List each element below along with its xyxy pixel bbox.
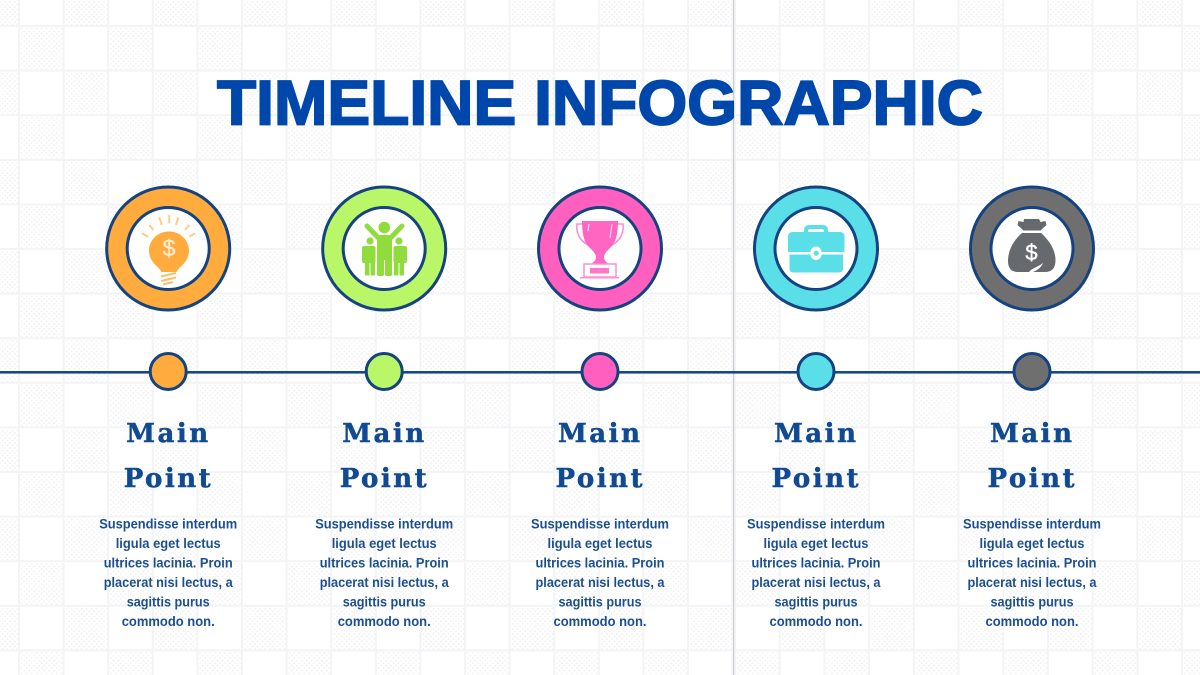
body text: ligula eget lectus [332, 536, 437, 551]
column 3: trophy [531, 187, 669, 629]
body text: ultrices lacinia. Proin [320, 556, 449, 570]
body text: sagittis purus [127, 594, 210, 610]
body text: ligula eget lectus [548, 536, 652, 551]
body text: Suspendisse interdum [315, 516, 453, 532]
body text: Suspendisse interdum [963, 516, 1101, 532]
ring: green [333, 197, 436, 300]
column 5: money bag [963, 187, 1101, 629]
title: TIMELINE INFOGRAPHIC [217, 68, 983, 138]
ring: orange [117, 197, 220, 300]
ring outlines [107, 187, 230, 310]
node: cyan [798, 354, 834, 390]
body text: placerat nisi lectus, a [752, 575, 881, 590]
ring outlines [970, 187, 1094, 310]
heading [556, 419, 642, 494]
body text: ultrices lacinia. Proin [104, 556, 233, 570]
body text: commodo non. [554, 614, 646, 629]
heading [772, 419, 858, 494]
timeline line [0, 371, 1200, 374]
body text: placerat nisi lectus, a [536, 575, 665, 590]
body text: sagittis purus [774, 594, 858, 610]
icon: briefcase [788, 225, 844, 272]
heading: Point [124, 464, 211, 494]
icon: money bag: $ [1025, 240, 1038, 265]
ring outlines [538, 187, 662, 310]
heading [124, 419, 211, 494]
icon: people cheering [362, 222, 407, 276]
body text: commodo non. [770, 614, 862, 629]
body text [963, 516, 1101, 629]
heading: Point [772, 464, 858, 494]
body text: placerat nisi lectus, a [104, 575, 233, 590]
heading: Point [988, 464, 1074, 494]
body text: sagittis purus [558, 594, 642, 610]
ring: gray [980, 197, 1084, 300]
body text [315, 516, 453, 629]
body text: placerat nisi lectus, a [320, 575, 449, 590]
body text: placerat nisi lectus, a [968, 575, 1097, 590]
body text: ligula eget lectus [980, 536, 1084, 551]
body text: Suspendisse interdum [747, 516, 885, 532]
body text: ultrices lacinia. Proin [968, 556, 1096, 570]
body text: Suspendisse interdum [99, 516, 237, 532]
body text: Suspendisse interdum [531, 516, 669, 532]
ring outlines [754, 187, 878, 310]
icon: light bulb with dollar: $ [163, 235, 176, 261]
heading: Point [556, 464, 642, 494]
heading: Main [342, 419, 424, 449]
body text: commodo non. [986, 614, 1078, 629]
node: green [366, 354, 402, 390]
body text: sagittis purus [990, 594, 1074, 610]
heading: Point [340, 464, 427, 494]
node: gray [1014, 354, 1050, 390]
body text: ligula eget lectus [764, 536, 868, 551]
heading: Main [558, 419, 640, 449]
column 2: team [315, 187, 453, 629]
body text [99, 516, 237, 629]
heading [340, 419, 427, 494]
icon: money bag [1008, 219, 1056, 272]
heading: Main [126, 419, 208, 449]
body text: commodo non. [338, 614, 431, 629]
icon: light bulb with dollar [142, 215, 195, 284]
ring: cyan [764, 197, 868, 300]
body text: ligula eget lectus [116, 536, 221, 551]
body text: ultrices lacinia. Proin [536, 556, 664, 570]
node: orange [150, 354, 186, 390]
icon: trophy [577, 221, 623, 278]
heading: Main [774, 419, 856, 449]
heading [988, 419, 1074, 494]
node: pink [582, 354, 618, 390]
body text: commodo non. [122, 614, 215, 629]
heading: Main [990, 419, 1072, 449]
body text: sagittis purus [343, 594, 426, 610]
column 4: briefcase [747, 187, 885, 629]
body text [531, 516, 669, 629]
body text: ultrices lacinia. Proin [752, 556, 880, 570]
body text [747, 516, 885, 629]
ring: pink [548, 197, 652, 300]
column 1: idea [99, 187, 237, 629]
ring outlines [323, 187, 446, 310]
